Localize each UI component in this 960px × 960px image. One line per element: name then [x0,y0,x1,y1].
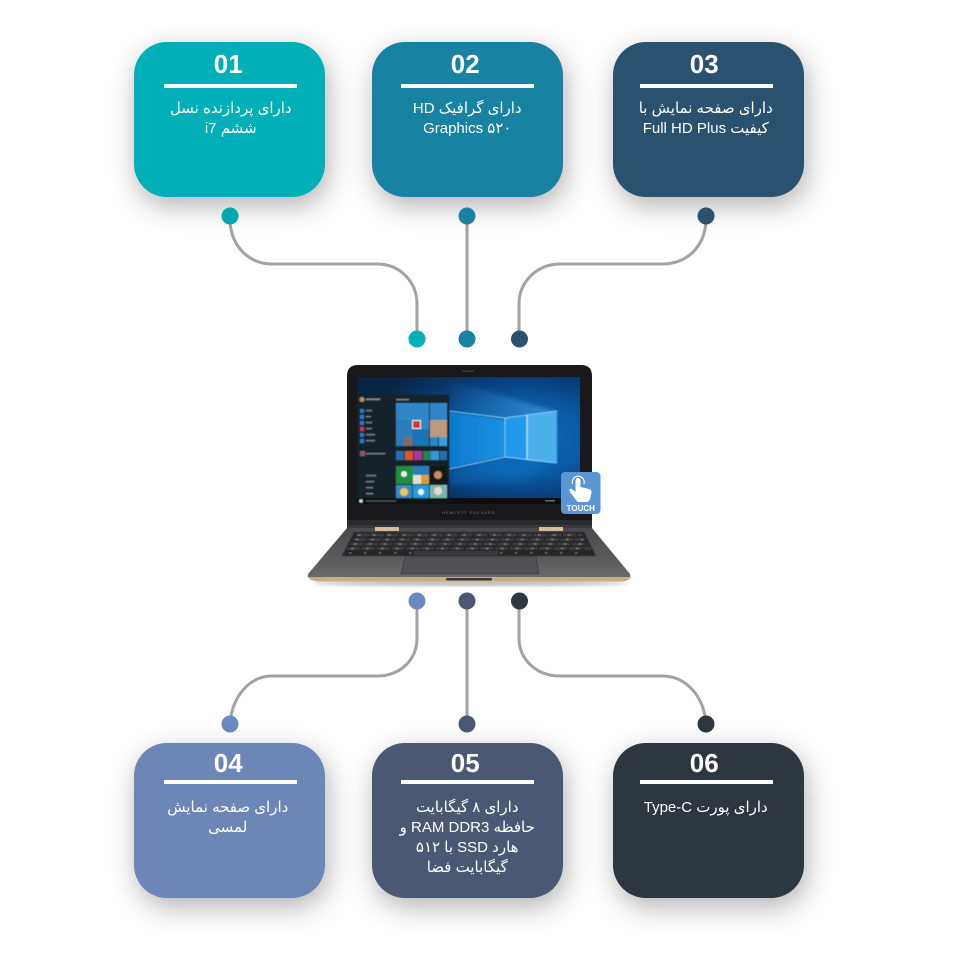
number 05: 05 [451,748,480,778]
text: HD Graphics 520: ۵۲۰ Graphics [423,120,511,137]
text: Full HD Plus display [639,100,773,137]
number 06: 06 [690,748,719,778]
text: sixth generation i7 processor [170,100,292,137]
icon: touch badge [561,472,600,514]
text: touch display: دارای صفحه نمایش [167,799,288,816]
laptop lid [347,365,592,526]
text: HD Graphics 520: دارای گرافیک HD [413,100,522,117]
text: Type-C port: دارای پورت Type-C [644,799,768,816]
number 01: 01 [214,49,243,79]
panel: card 03 [613,42,804,197]
brand text on bezel: HEWLETT PACKARD [442,511,496,515]
text: 8GB RAM and 512GB SSD: هارد SSD با ۵۱۲ [416,839,519,856]
keyboard [342,532,596,556]
number 04: 04 [214,748,243,778]
laptop base and keyboard [308,525,631,586]
live tiles [396,403,447,499]
number 03: 03 [690,49,719,79]
panel: card 04 [134,743,324,898]
text: sixth generation i7 processor: دارای پردازنده نسل [170,100,292,117]
text: Full HD Plus display: کیفیت Full HD Plus [643,120,769,137]
text: sixth generation i7 processor: ششم i7 [205,120,257,137]
panel: card 06 [613,743,804,898]
text: 8GB RAM and 512GB SSD: گیگابایت فضا [427,859,508,876]
text: HD Graphics 520 [413,100,522,137]
text: 8GB RAM and 512GB SSD: دارای ۸ گیگابایت [416,799,519,816]
text: touch display: لمسی [208,819,247,836]
panel: card 05 [372,743,562,898]
trackpad [401,557,539,574]
text: Full HD Plus display: دارای صفحه نمایش با [639,100,773,117]
text: 8GB RAM and 512GB SSD [399,798,535,876]
start menu [357,395,449,504]
panel: card 02 [372,42,562,197]
number 02: 02 [451,49,480,79]
panel: card 01 [134,42,324,197]
text: 8GB RAM and 512GB SSD: حافظه RAM DDR3 و [400,819,535,836]
icon: touch badge: TOUCH [567,504,595,513]
screen wallpaper [357,377,580,504]
text: touch display [167,799,288,836]
